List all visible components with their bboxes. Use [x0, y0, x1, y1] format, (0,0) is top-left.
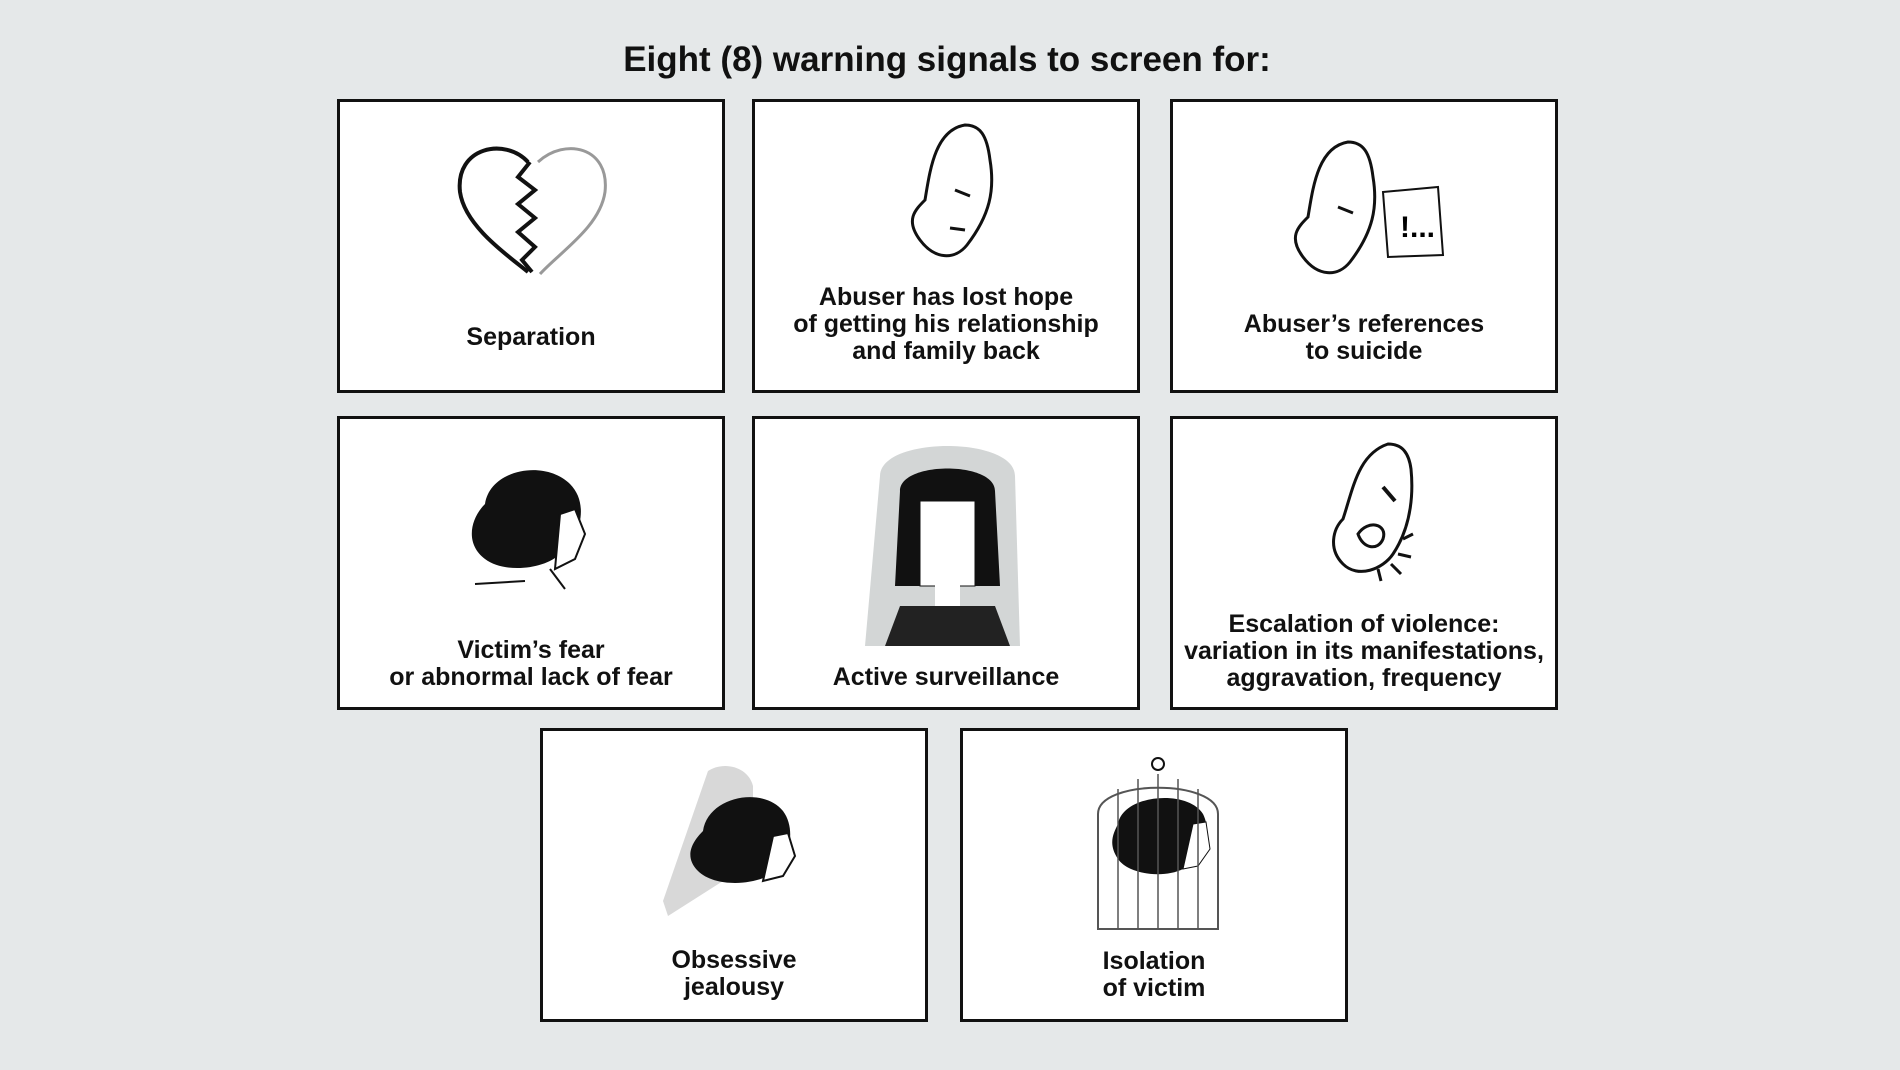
caption: Escalation of violence:	[1229, 610, 1499, 638]
icon: woman head	[472, 470, 586, 590]
caption: Victim’s fear	[457, 636, 605, 664]
caption: aggravation, frequency	[1226, 664, 1502, 692]
icon: woman with shadow	[663, 766, 796, 916]
icon: face and note: !...	[1400, 211, 1435, 244]
panel: isolation	[960, 728, 1348, 1022]
caption: Active surveillance	[833, 663, 1059, 691]
caption	[1244, 310, 1484, 365]
caption: Isolation	[1103, 947, 1205, 975]
caption	[1103, 947, 1205, 1002]
panel: lost hope	[752, 99, 1140, 393]
panel: references to suicide	[1170, 99, 1558, 393]
caption: Obsessive	[671, 946, 797, 974]
icon: screaming face	[1332, 442, 1414, 582]
caption: Abuser has lost hope	[819, 283, 1073, 311]
icon: sad face	[910, 124, 994, 258]
caption	[671, 946, 797, 1001]
caption: of victim	[1103, 974, 1205, 1002]
caption: Separation	[466, 323, 596, 351]
caption: to suicide	[1306, 337, 1422, 365]
caption	[389, 636, 673, 691]
title: Eight (8) warning signals to screen for:	[623, 40, 1271, 79]
icon: woman in cage	[1097, 757, 1219, 930]
caption	[793, 283, 1099, 365]
caption: jealousy	[684, 973, 784, 1001]
caption: Abuser’s references	[1244, 310, 1484, 338]
panel: escalation	[1170, 416, 1558, 710]
icon: broken heart	[458, 146, 607, 275]
caption	[1184, 610, 1544, 692]
caption: of getting his relationship	[793, 310, 1099, 338]
panel: victim's fear	[337, 416, 725, 710]
panel: obsessive jealousy	[540, 728, 928, 1022]
caption: or abnormal lack of fear	[389, 663, 673, 691]
caption: and family back	[852, 337, 1040, 365]
icon: face and note	[1294, 140, 1444, 274]
icon: woman under surveillance	[865, 446, 1020, 646]
panel: separation	[337, 99, 725, 393]
panel: active surveillance	[752, 416, 1140, 710]
caption: variation in its manifestations,	[1184, 637, 1544, 665]
